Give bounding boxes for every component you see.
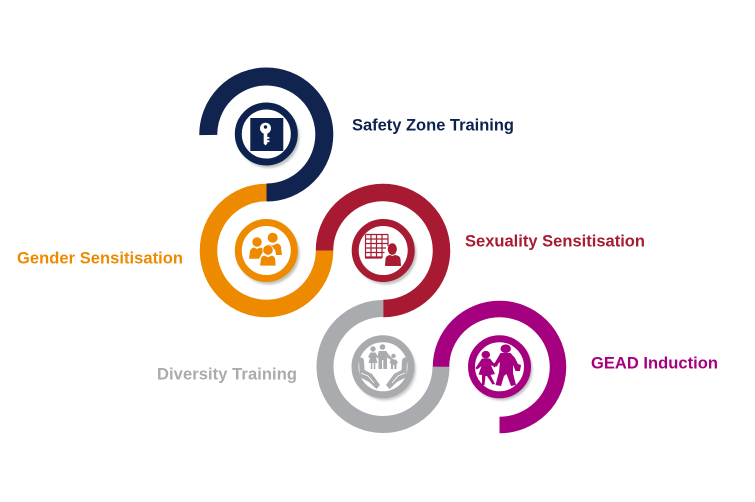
label: Gender Sensitisation: Gender Sensitisation [17, 250, 183, 268]
icon: key in navy circle [238, 106, 300, 168]
arc: purple segment [441, 309, 558, 425]
label: GEAD Induction: GEAD Induction [591, 354, 718, 372]
label: Diversity Training: Diversity Training [157, 366, 297, 384]
icon: group of people in orange circle [238, 222, 300, 284]
arc: grey segment [325, 308, 441, 424]
arc: crimson segment [324, 193, 442, 308]
label: Sexuality Sensitisation: Sexuality Sensitisation [465, 232, 645, 250]
arc: navy segment [208, 77, 324, 192]
icon: adult and child walking in purple circle [470, 338, 532, 400]
icon: family and hands in grey circle [354, 338, 416, 400]
label: Safety Zone Training: Safety Zone Training [352, 116, 514, 134]
icon: table and person in crimson circle [354, 222, 416, 284]
arc: orange segment [208, 192, 324, 308]
